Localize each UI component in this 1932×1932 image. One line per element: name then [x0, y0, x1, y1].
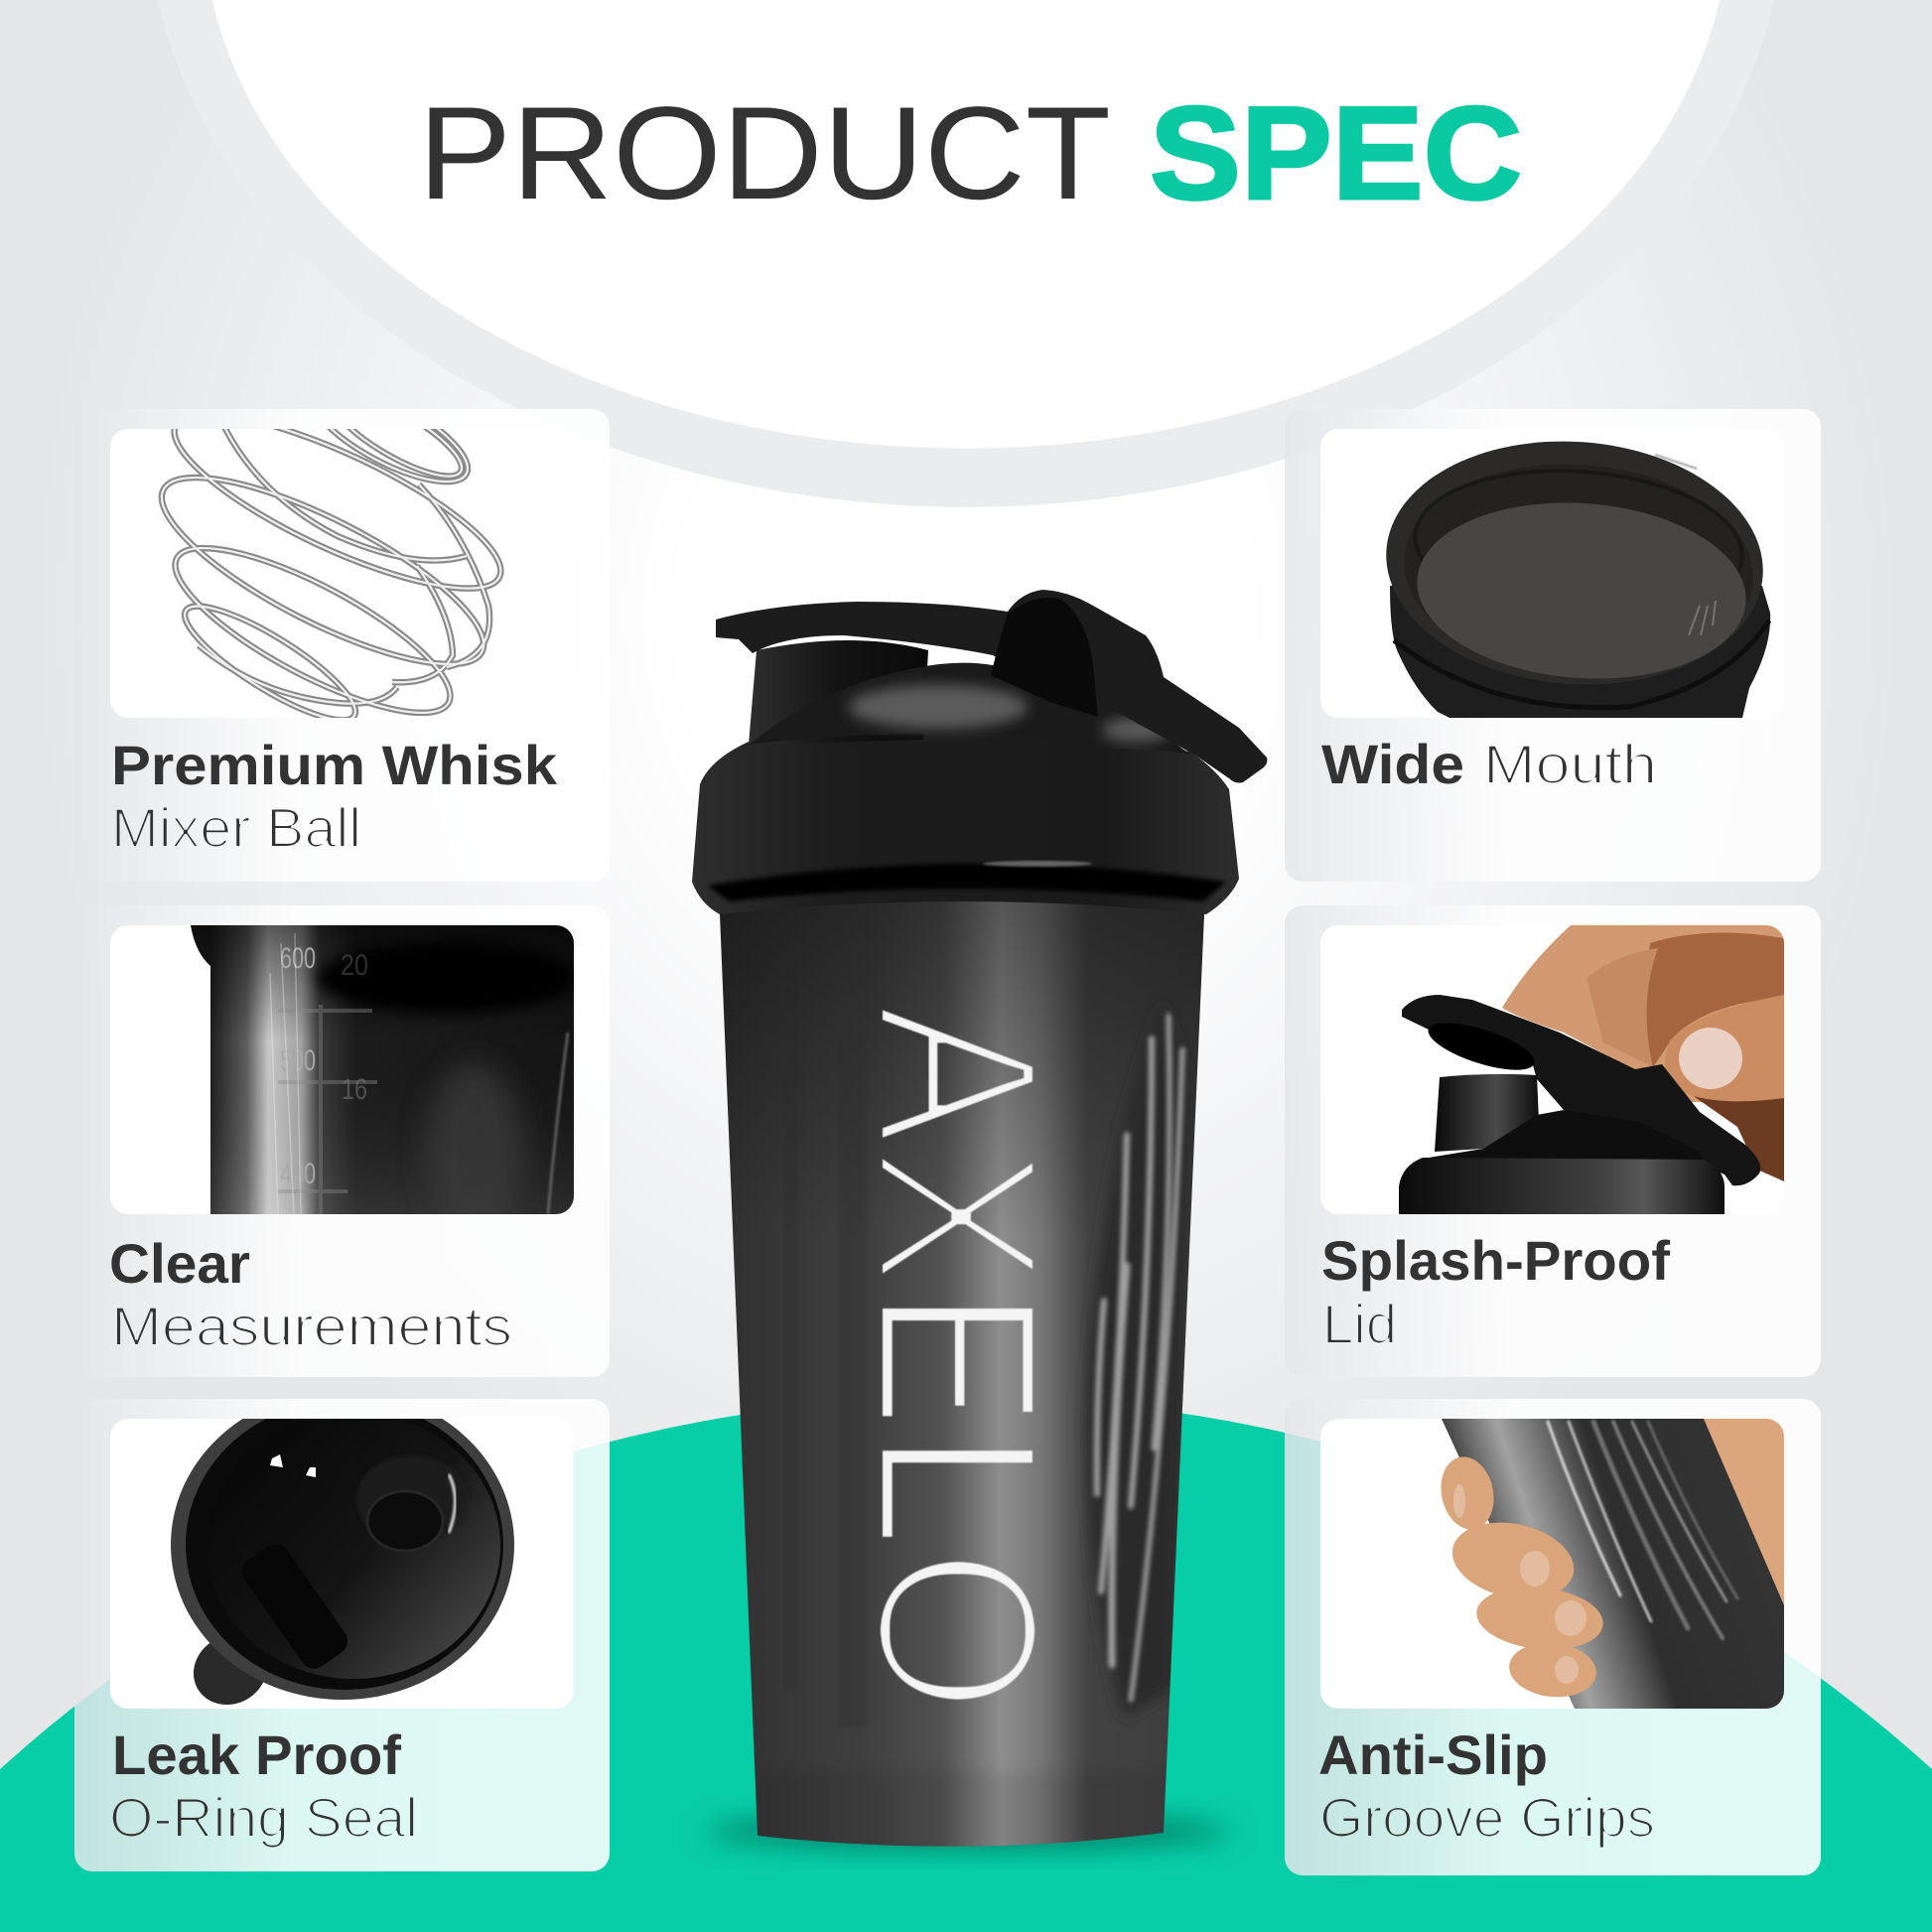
product: shaker bottle — [692, 590, 1267, 1862]
photo: lid underside with o-ring — [171, 1390, 514, 1718]
title — [418, 80, 1522, 227]
panel: wide mouth — [1285, 409, 1821, 882]
cap hinge — [991, 598, 1098, 717]
label: anti-slip grips: Groove Grips — [1319, 1786, 1655, 1849]
photo: bottle measurement scale: 400 — [280, 1158, 316, 1190]
label: leak proof: O-Ring Seal — [109, 1786, 418, 1849]
label: clear measurements — [109, 1232, 512, 1357]
photo: bottle measurement scale: 600 — [280, 942, 316, 975]
label: premium whisk: Mixer Ball — [111, 796, 361, 859]
title: PRODUCT — [418, 80, 1111, 227]
photo: bottle measurement scale: 16 — [342, 1073, 367, 1106]
label: wide mouth: Mouth — [1483, 733, 1657, 795]
white header arc — [212, 0, 1720, 449]
label: wide mouth: Wide — [1321, 733, 1464, 795]
label: premium whisk: Premium Whisk — [111, 734, 558, 796]
title: SPEC — [1150, 80, 1522, 227]
panel: leak proof — [74, 1390, 610, 1871]
label: anti-slip grips — [1318, 1724, 1655, 1849]
screw-on collar — [692, 731, 1239, 914]
brand logo on bottle: AXELO — [830, 1003, 1086, 1714]
bottle ground shadow — [705, 1815, 1231, 1849]
flip cap — [716, 590, 1267, 782]
photo: bottle measurement scale: 20 — [341, 949, 368, 982]
panel: anti-slip grips — [1285, 1399, 1821, 1875]
spout — [749, 640, 928, 745]
photo: whisk mixer ball — [159, 429, 504, 718]
outer grey arc — [158, 0, 1774, 507]
domed lid top — [749, 663, 1190, 755]
label: anti-slip grips: Anti-Slip — [1318, 1724, 1548, 1786]
panel: premium whisk — [110, 409, 610, 882]
label: leak proof — [109, 1724, 418, 1849]
photo: bottle measurement scale: 500 — [280, 1044, 316, 1077]
label: splash-proof lid: Lid — [1322, 1293, 1397, 1355]
bottle body — [720, 898, 1204, 1862]
label: splash-proof lid: Splash-Proof — [1321, 1229, 1670, 1292]
photo: hand opening flip cap — [1399, 925, 1784, 1214]
label: clear measurements: Clear — [109, 1232, 250, 1295]
panel: splash-proof lid — [1285, 905, 1821, 1377]
panel: clear measurements — [74, 905, 610, 1377]
photo: bottle measurement scale — [191, 925, 576, 1241]
label: wide mouth — [1321, 733, 1657, 795]
label: splash-proof lid — [1321, 1229, 1670, 1355]
photo: open bottle mouth — [1378, 429, 1771, 718]
label: leak proof: Leak Proof — [112, 1724, 401, 1786]
photo: hand gripping grooved bottle — [1435, 1419, 1784, 1709]
green floor arc — [0, 1397, 1932, 1932]
label: premium whisk — [111, 734, 558, 859]
label: clear measurements: Measurements — [111, 1295, 512, 1357]
